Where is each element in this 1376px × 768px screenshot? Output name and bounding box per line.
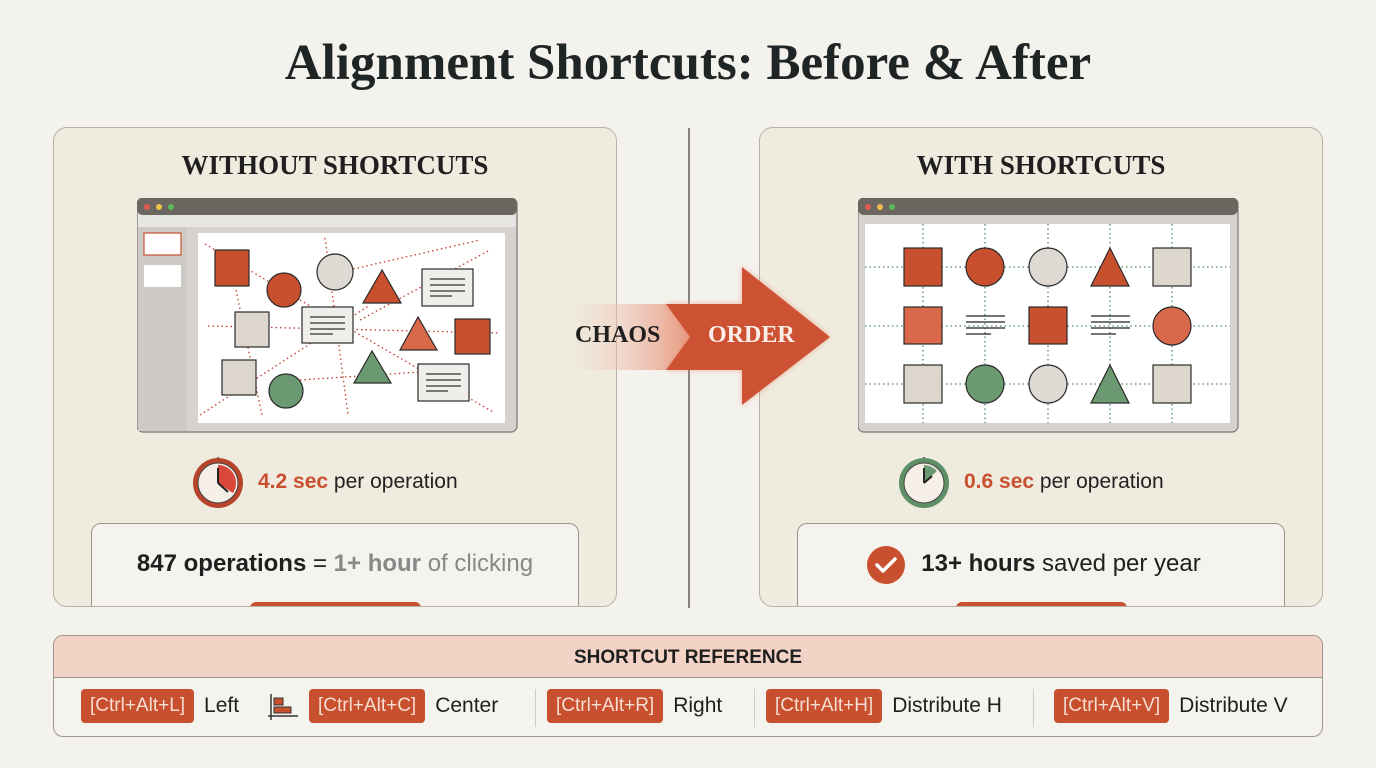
heading: without: WITHOUT SHORTCUTS (182, 150, 488, 180)
shortcut: distribute v (1054, 689, 1288, 723)
label: order: ORDER (708, 322, 795, 348)
stat: 0.6 sec (899, 457, 1164, 508)
stat: 4.2 sec: 4.2 sec per operation (258, 470, 458, 493)
panel: shortcut reference (53, 635, 1323, 737)
window: chaotic slide (137, 198, 518, 433)
callout: 13+ hours saved: 13+ hours saved per year (921, 550, 1201, 577)
heading: shortcut reference (54, 636, 1322, 678)
shortcut: left: Left (204, 694, 239, 717)
window: ordered slide (858, 198, 1239, 433)
label: chaos: CHAOS (575, 322, 660, 348)
icon: green stopwatch (899, 457, 949, 508)
title: Alignment Shortcuts: Before & After (285, 35, 1091, 91)
divider (688, 128, 690, 608)
shortcut: left (81, 689, 239, 723)
shortcut: distribute h (766, 689, 1002, 723)
shortcut: distribute v: Distribute V (1179, 694, 1288, 717)
arrow: chaos to order (575, 266, 832, 406)
panel: with shortcuts (759, 127, 1323, 607)
stat: 0.6 sec: 0.6 sec per operation (964, 470, 1164, 493)
stat: 4.2 sec (193, 457, 458, 508)
shortcut: left: [Ctrl+Alt+L] (90, 695, 185, 716)
heading: shortcut reference: SHORTCUT REFERENCE (574, 647, 802, 668)
shortcut: distribute h: Distribute H (892, 694, 1002, 717)
panel: without shortcuts (53, 127, 617, 607)
shortcut: center (309, 689, 498, 723)
shortcut: center: [Ctrl+Alt+C] (318, 695, 416, 716)
shortcut: right: [Ctrl+Alt+R] (556, 695, 654, 716)
icon: align (268, 694, 298, 720)
shortcut: right: Right (673, 694, 722, 717)
icon: red stopwatch (193, 457, 243, 508)
callout: 847 operations: 847 operations = 1+ hour of clicking (137, 550, 533, 577)
callout: 847 operations (91, 523, 579, 643)
shortcut: center: Center (435, 694, 498, 717)
callout: 13+ hours saved (797, 523, 1285, 643)
heading: with: WITH SHORTCUTS (917, 150, 1165, 180)
shortcut: right (547, 689, 722, 723)
shortcut: distribute h: [Ctrl+Alt+H] (775, 695, 873, 716)
shortcut: distribute v: [Ctrl+Alt+V] (1063, 695, 1160, 716)
icon: check (867, 546, 905, 584)
